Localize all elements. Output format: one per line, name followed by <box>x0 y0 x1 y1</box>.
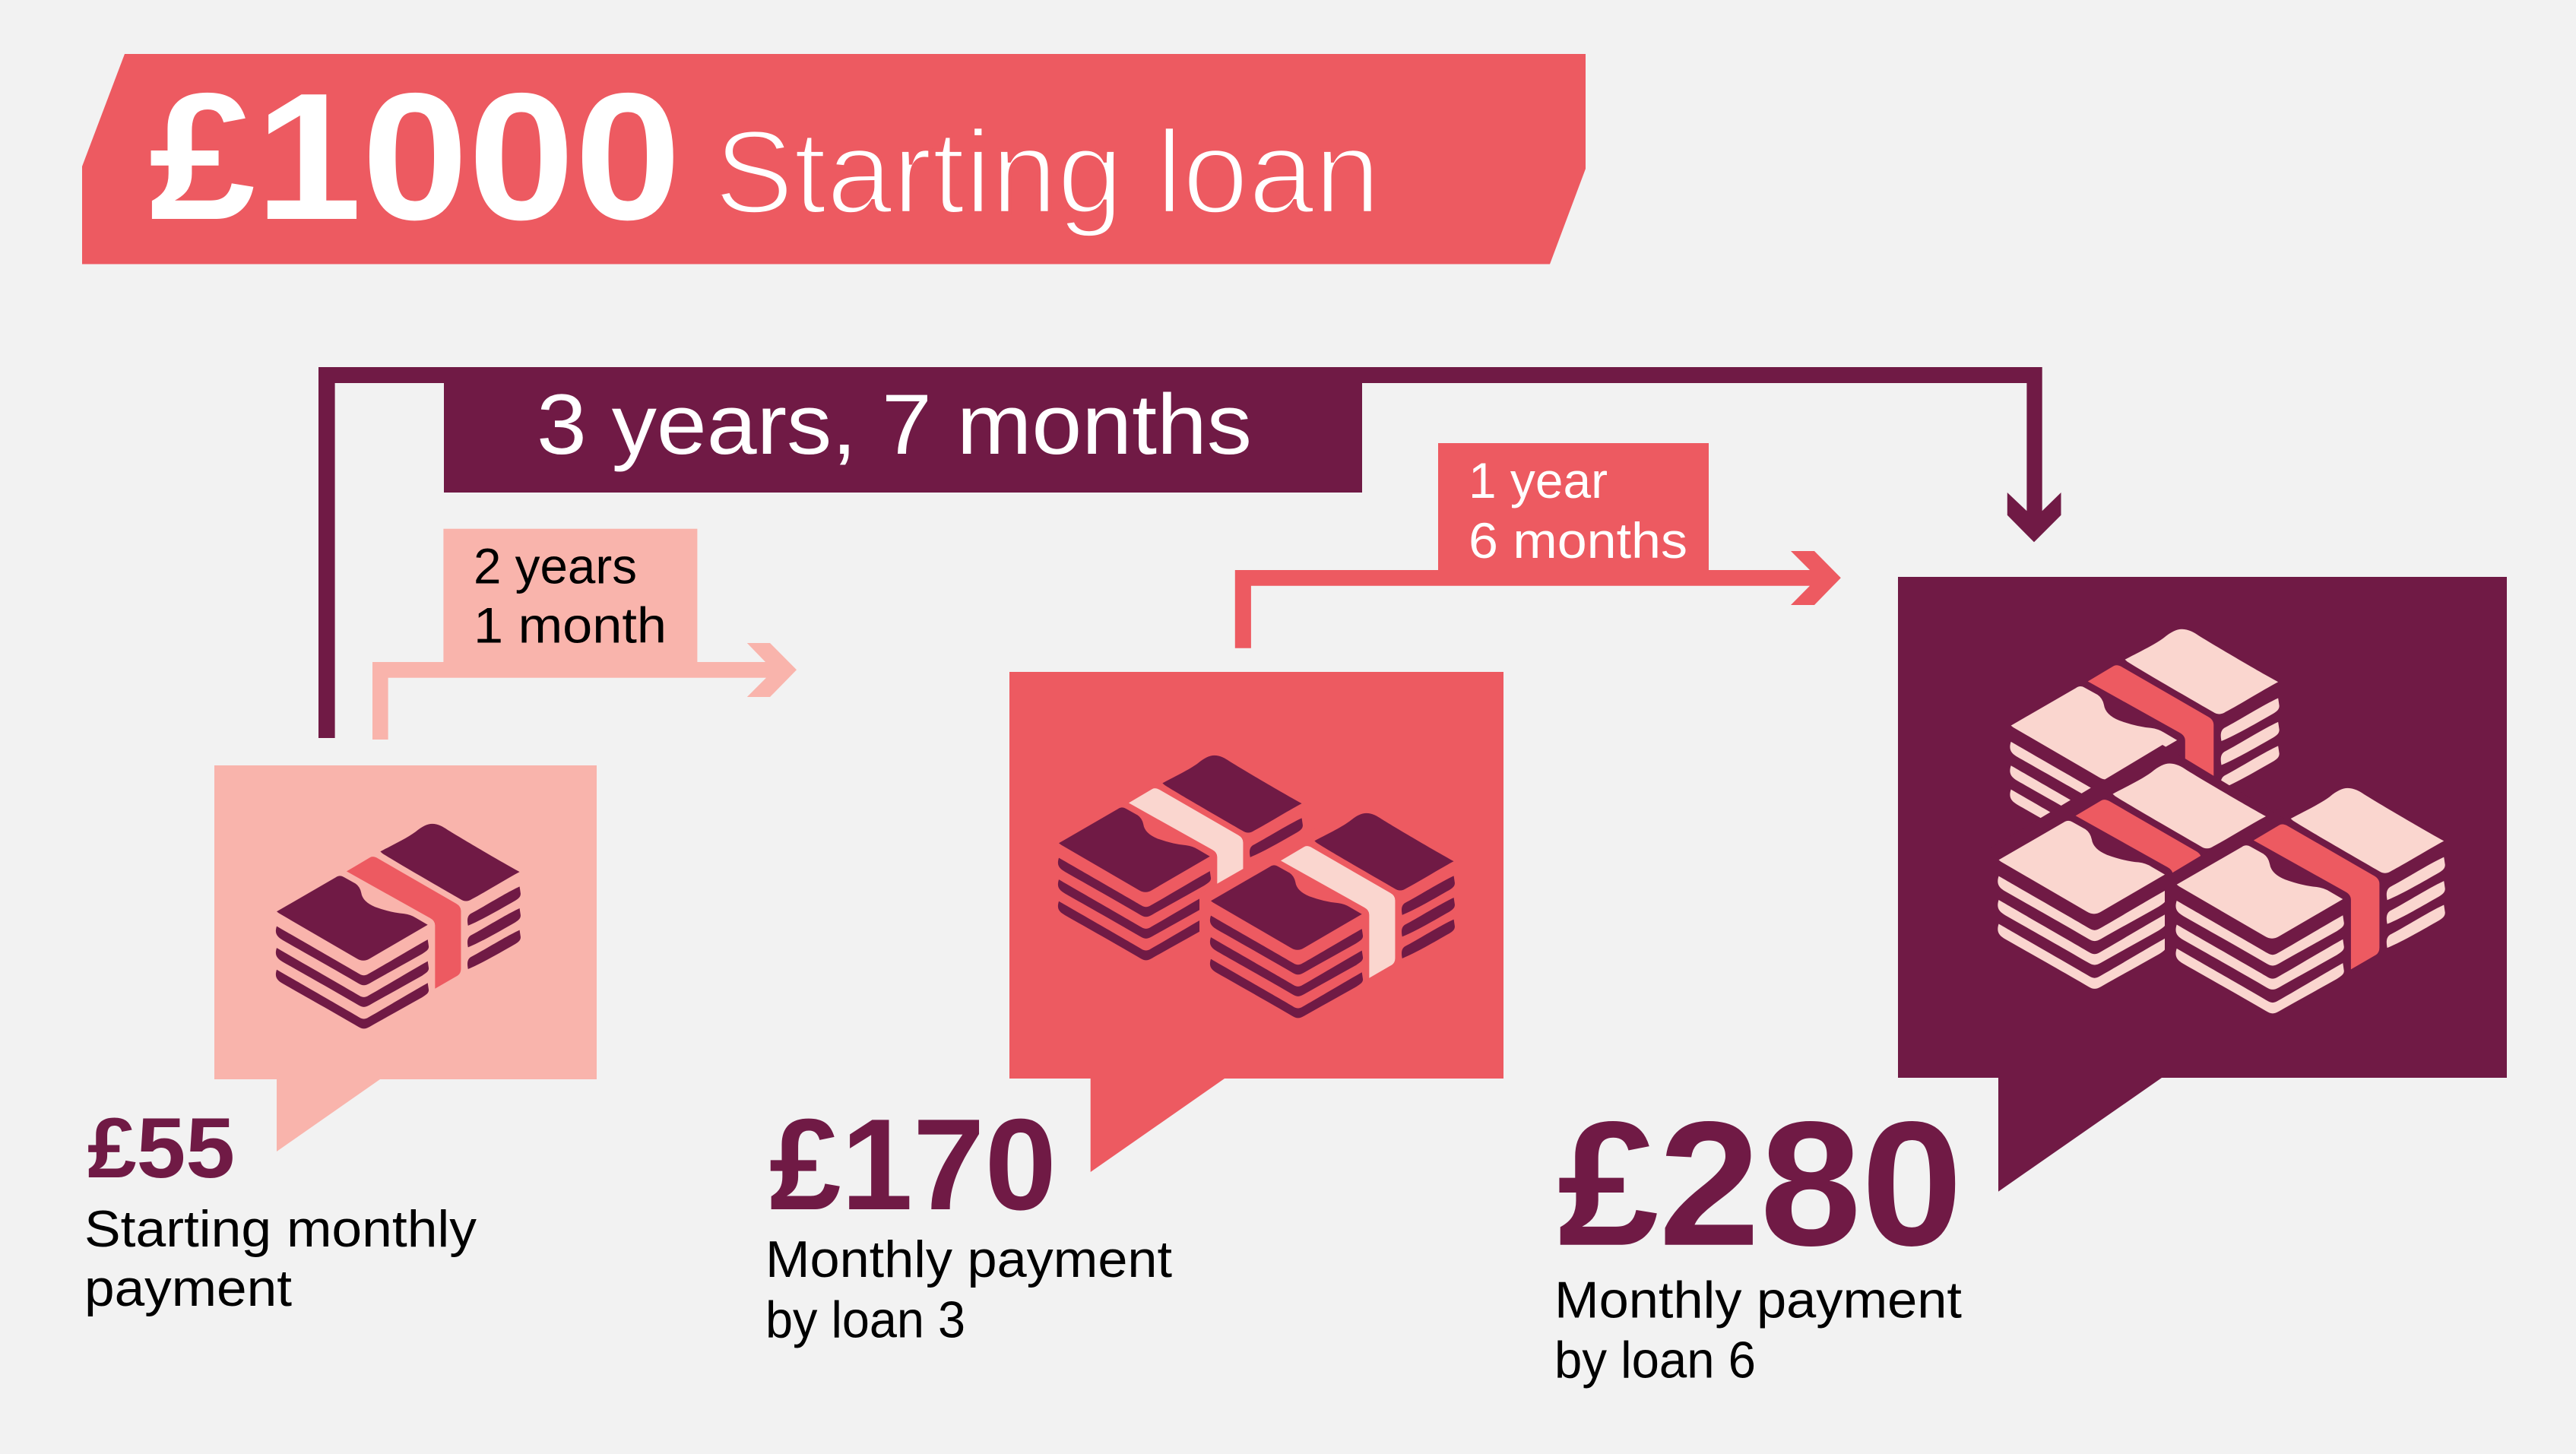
duration box: 1 year 6 months: 6 months <box>1469 512 1687 569</box>
amount: £55: £55 <box>87 1101 235 1196</box>
title banner: £1000 starting loan <box>82 54 1586 265</box>
heading amount: £1000: £1000 <box>149 56 681 258</box>
heading label: Starting loan: Starting loan <box>714 106 1380 239</box>
amount: £280: £280 <box>1557 1085 1963 1283</box>
arrow: 2 years 1 month <box>372 529 797 740</box>
duration box: 2 years 1 month: 2 years <box>474 537 637 594</box>
duration box: 3 years, 7 months: 3 years, 7 months <box>537 377 1252 472</box>
arrow: 3 years 7 months bracket <box>318 367 2061 738</box>
caption: starting monthly payment: payment <box>84 1259 292 1317</box>
caption: monthly payment by loan 6: Monthly payment <box>1554 1271 1962 1329</box>
panel: starting payment speech bubble <box>214 765 597 1151</box>
panel: loan 6 payment speech bubble <box>1898 577 2507 1192</box>
duration box: 2 years 1 month: 1 month <box>474 597 667 654</box>
duration box: 1 year 6 months <box>1438 443 1709 571</box>
caption: monthly payment by loan 6 <box>1554 1085 1963 1389</box>
caption: monthly payment by loan 6: by loan 6 <box>1554 1332 1756 1389</box>
caption: monthly payment by loan 3: by loan 3 <box>765 1291 965 1348</box>
caption: starting monthly payment: Starting monthly <box>84 1200 477 1258</box>
duration box: 3 years, 7 months <box>444 377 1362 493</box>
amount: £170: £170 <box>769 1092 1057 1237</box>
duration box: 2 years 1 month <box>443 529 697 663</box>
icon: one stack of notes <box>276 824 521 1028</box>
caption: starting monthly payment <box>84 1101 477 1317</box>
panel: loan 3 payment speech bubble <box>1009 672 1503 1172</box>
caption: monthly payment by loan 3 <box>765 1092 1172 1348</box>
arrow: 1 year 6 months <box>1235 443 1841 648</box>
duration box: 1 year 6 months: 1 year <box>1469 452 1608 508</box>
icon: three stacks of notes <box>1991 629 2445 1013</box>
caption: monthly payment by loan 3: Monthly payment <box>765 1231 1172 1288</box>
icon: two stacks of notes <box>1058 756 1455 1064</box>
